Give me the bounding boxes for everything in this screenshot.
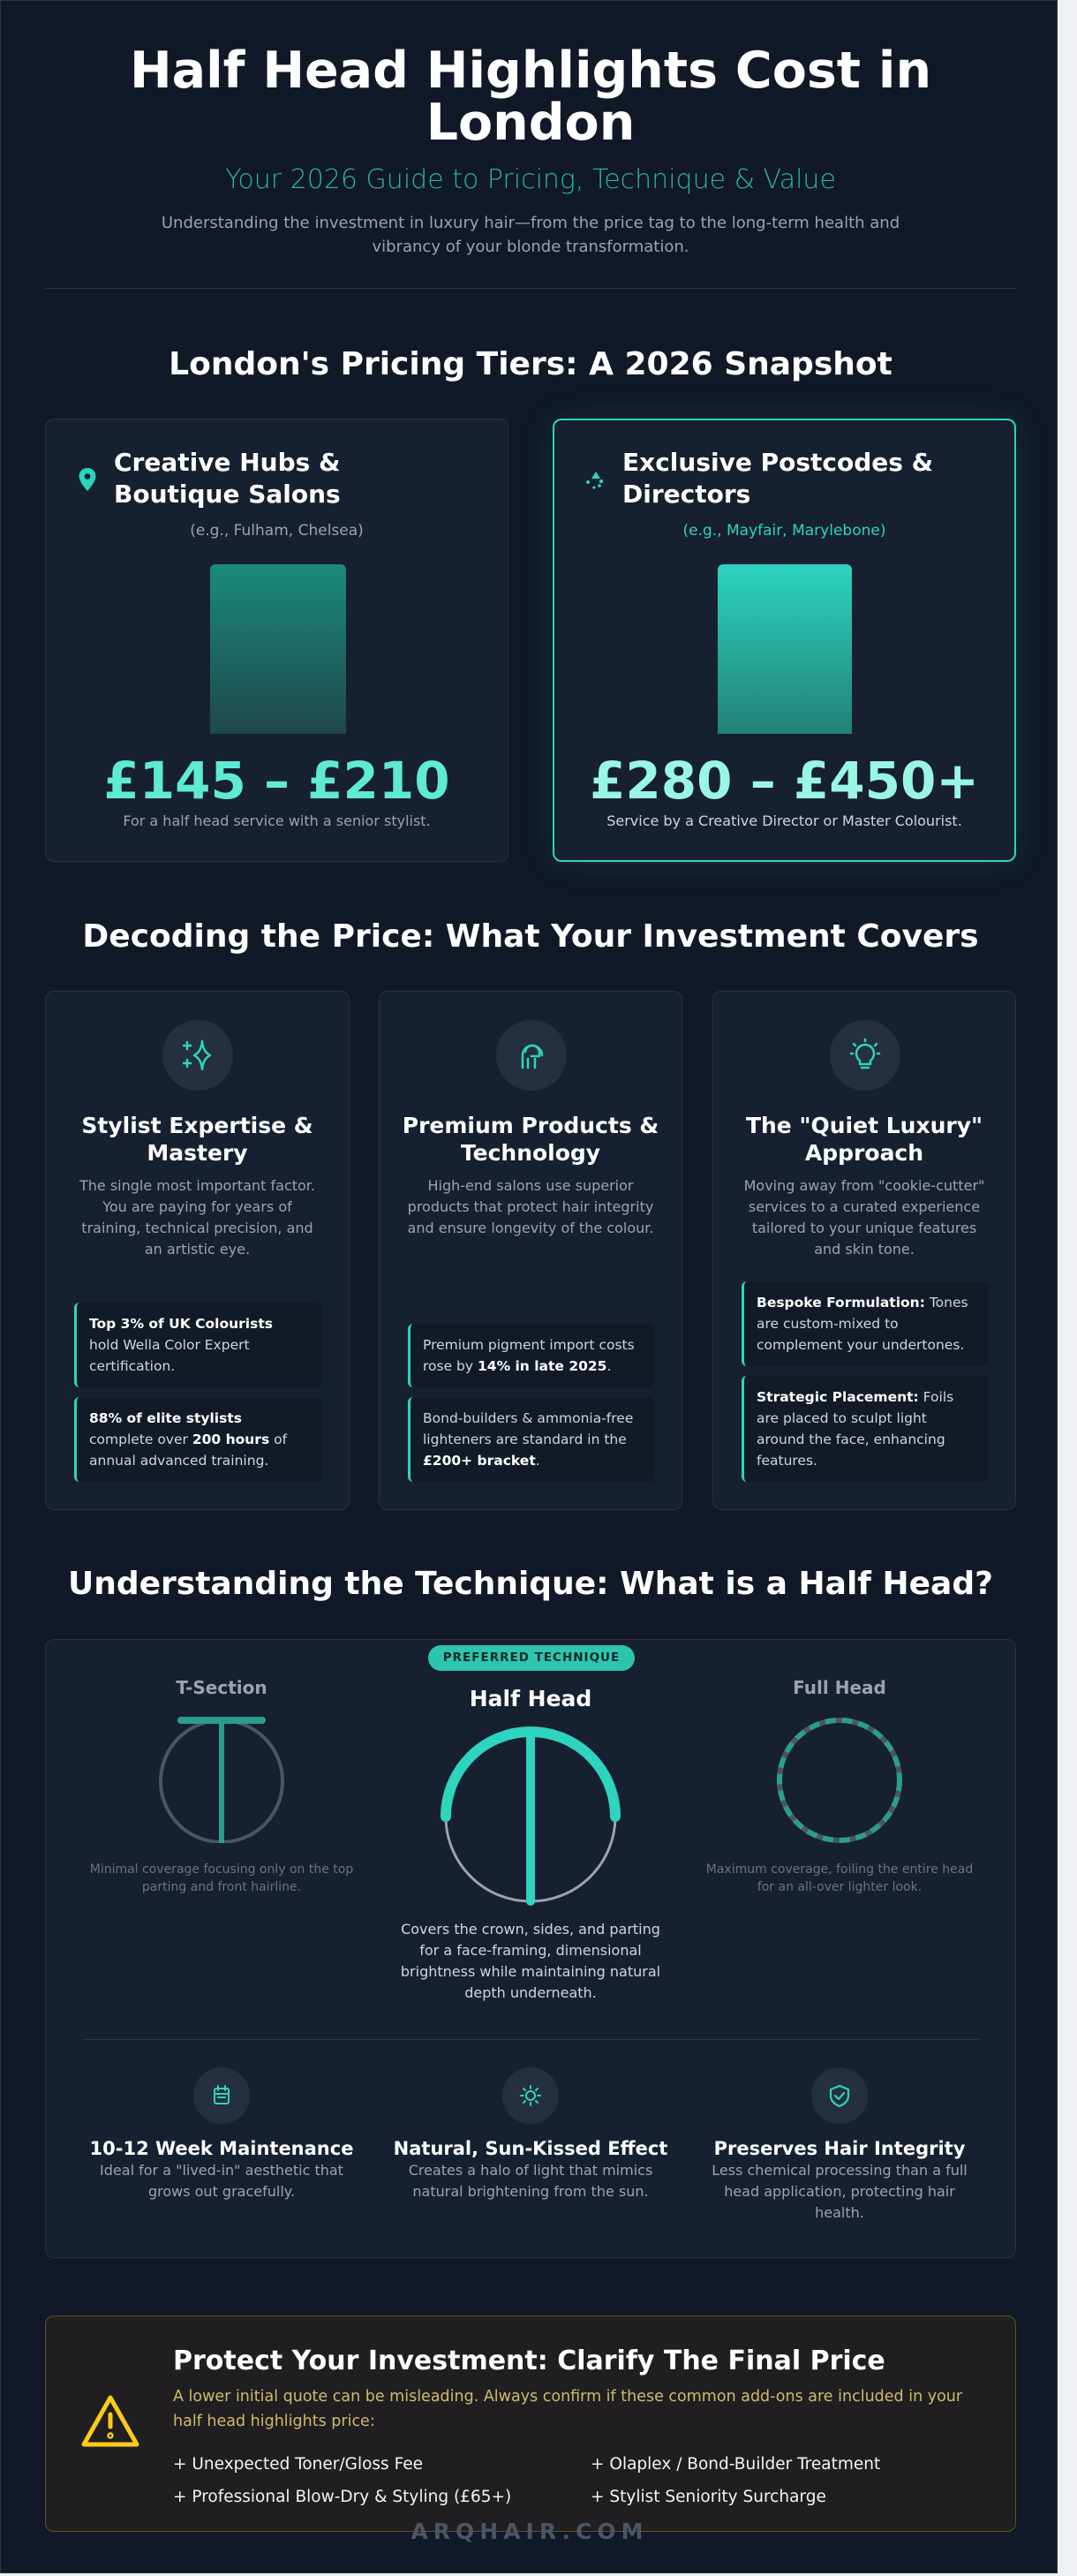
warning text: A lower initial quote can be misleading. Always confirm if these common add-ons are included in your half head highlights price: xyxy=(173,2388,962,2430)
callout: top 3%: certification. xyxy=(89,1358,175,1374)
panel: technique comparison: Natural, Sun-Kissed Effect xyxy=(394,2138,667,2159)
price: £280 – £450+ xyxy=(590,751,979,811)
title xyxy=(130,42,931,152)
panel: technique comparison: Less chemical processing than a full head application, protecting hair health. xyxy=(712,2162,968,2221)
icon: shield check xyxy=(811,2067,868,2124)
callout: top 3%: hold Wella Color Expert xyxy=(89,1337,250,1353)
callout: bond builders xyxy=(408,1397,655,1482)
tier title: Boutique Salons xyxy=(114,480,341,509)
panel: premium products xyxy=(379,991,682,1510)
heading: decoding the price: Decoding the Price: What Your Investment Covers xyxy=(82,918,979,955)
icon: hair dryer head xyxy=(496,1020,567,1091)
panel: technique comparison: Ideal for a "lived-in" aesthetic that grows out gracefully. xyxy=(100,2162,343,2200)
callout: top 3% xyxy=(74,1303,321,1387)
callout: 88%: complete over 200 hours of xyxy=(89,1432,287,1447)
callout: placement: are placed to sculpt light xyxy=(757,1410,927,1426)
caption: Service by a Creative Director or Master Colourist. xyxy=(606,812,962,829)
tier examples: (e.g., Fulham, Chelsea) xyxy=(190,522,364,540)
card title: The "Quiet Luxury" xyxy=(746,1113,983,1138)
diagram: full head: Full Head xyxy=(793,1677,886,1698)
callout: bond builders: £200+ bracket. xyxy=(423,1453,540,1469)
diagram: half head xyxy=(401,1686,660,2001)
diagram: full head: Maximum coverage, foiling the entire head for an all-over lighter look. xyxy=(706,1862,973,1894)
callout: placement: around the face, enhancing xyxy=(757,1432,945,1447)
heading: pricing tiers: London's Pricing Tiers: A 2026 Snapshot xyxy=(169,346,892,382)
icon: sparkles xyxy=(162,1020,233,1091)
diagram: T-section: T-Section xyxy=(176,1677,267,1698)
icon: lightbulb xyxy=(830,1020,900,1091)
callout: protect your investment: + Professional Blow-Dry & Styling (£65+) xyxy=(173,2488,511,2506)
tier title xyxy=(114,448,341,509)
callout: protect your investment: + Stylist Seniority Surcharge xyxy=(591,2488,826,2506)
feature: integrity xyxy=(712,2067,968,2221)
tier title: Exclusive Postcodes & xyxy=(622,448,933,477)
card description xyxy=(408,1177,653,1236)
title: Half Head Highlights Cost in xyxy=(130,42,931,100)
callout: bespoke: Bespoke Formulation: Tones xyxy=(757,1295,968,1311)
callout: 88% xyxy=(74,1397,321,1482)
panel: exclusive postcodes tier xyxy=(553,419,1016,862)
callout: 88%: annual advanced training. xyxy=(89,1453,268,1469)
intro text xyxy=(162,214,900,256)
panel: creative hubs tier xyxy=(45,419,508,862)
panel: technique comparison: 10-12 Week Maintenance xyxy=(90,2138,353,2159)
diagram: T-section: Minimal coverage focusing only on the top parting and front hairline. xyxy=(90,1862,353,1894)
callout: pigment costs xyxy=(408,1324,655,1387)
panel: stylist expertise xyxy=(45,991,350,1510)
warning title: Protect Your Investment: Clarify The Final Price xyxy=(173,2346,885,2376)
icon: sparkle xyxy=(586,472,604,489)
card title xyxy=(746,1113,983,1166)
callout: bespoke: are custom-mixed to xyxy=(757,1316,899,1332)
intro text: Understanding the investment in luxury hair—from the price tag to the long-term health and xyxy=(162,214,900,232)
card description: High-end salons use superior xyxy=(427,1177,633,1194)
panel: quiet luxury xyxy=(712,991,1016,1510)
callout: protect your investment: + Olaplex / Bond-Builder Treatment xyxy=(591,2455,880,2474)
callout: top 3%: Top 3% of UK Colourists xyxy=(89,1316,273,1332)
callout: 88%: 88% of elite stylists xyxy=(89,1410,242,1426)
tier examples: (e.g., Mayfair, Marylebone) xyxy=(683,522,885,540)
card title: Approach xyxy=(805,1140,923,1166)
caption: For a half head service with a senior stylist. xyxy=(123,812,431,829)
badge: preferred technique: PREFERRED TECHNIQUE xyxy=(443,1651,620,1665)
icon: calendar xyxy=(193,2067,250,2124)
card description: and ensure longevity of the colour. xyxy=(408,1220,653,1236)
callout: placement xyxy=(742,1376,989,1482)
card description: products that protect hair integrity xyxy=(408,1198,653,1215)
footer brand: ARQHAIR.COM xyxy=(410,2519,649,2544)
heading: technique: Understanding the Technique: What is a Half Head? xyxy=(68,1566,993,1602)
price: £145 – £210 xyxy=(103,751,450,811)
subtitle: Your 2026 Guide to Pricing, Technique & Value xyxy=(225,164,836,195)
add-on list xyxy=(173,2455,880,2506)
callout: bond builders: lighteners are standard in the xyxy=(423,1432,627,1447)
icon: warning xyxy=(81,2395,139,2446)
icon: map pin xyxy=(79,468,95,491)
icon: sun xyxy=(502,2067,559,2124)
intro text: vibrancy of your blonde transformation. xyxy=(373,238,689,256)
card title: Premium Products & xyxy=(403,1113,659,1138)
bar xyxy=(210,564,346,734)
callout: pigment costs: Premium pigment import costs xyxy=(423,1337,635,1353)
callout: placement: features. xyxy=(757,1453,817,1469)
callout: placement: Strategic Placement: Foils xyxy=(757,1389,953,1405)
badge: preferred technique xyxy=(428,1645,635,1671)
title: London xyxy=(426,94,635,152)
card title: Stylist Expertise & xyxy=(81,1113,313,1138)
callout: protect your investment xyxy=(45,2315,1016,2532)
callout: bond builders: Bond-builders & ammonia-free xyxy=(423,1410,633,1426)
tier title: Directors xyxy=(622,480,750,509)
panel: technique comparison xyxy=(45,1639,1016,2258)
bar xyxy=(718,564,852,734)
card title xyxy=(81,1113,313,1166)
callout: protect your investment: + Unexpected Toner/Gloss Fee xyxy=(173,2455,423,2474)
callout: bespoke: complement your undertones. xyxy=(757,1337,964,1353)
card title: Technology xyxy=(461,1140,600,1166)
callout: pigment costs: rose by 14% in late 2025. xyxy=(423,1358,611,1374)
card title xyxy=(403,1113,659,1166)
feature: sun-kissed xyxy=(394,2067,667,2200)
diagram: full head xyxy=(706,1677,973,1894)
tier title xyxy=(622,448,933,509)
card description: Moving away from "cookie-cutter" services to a curated experience tailored to your unique features and skin tone. xyxy=(744,1177,984,1258)
callout: bespoke xyxy=(742,1281,989,1366)
card title: Mastery xyxy=(147,1140,248,1166)
card description: The single most important factor. You are paying for years of training, technical precision, and an artistic eye. xyxy=(79,1177,315,1258)
panel: technique comparison: Preserves Hair Integrity xyxy=(714,2138,965,2159)
panel: technique comparison: Creates a halo of light that mimics natural brightening from the sun. xyxy=(409,2162,652,2200)
diagram: half head: Covers the crown, sides, and parting for a face-framing, dimensional brightness while maintaining natural depth underneath. xyxy=(401,1921,660,2001)
tier title: Creative Hubs & xyxy=(114,448,340,477)
feature: maintenance xyxy=(90,2067,353,2200)
diagram: T-section xyxy=(90,1677,353,1894)
diagram: half head: Half Head xyxy=(470,1686,591,1711)
